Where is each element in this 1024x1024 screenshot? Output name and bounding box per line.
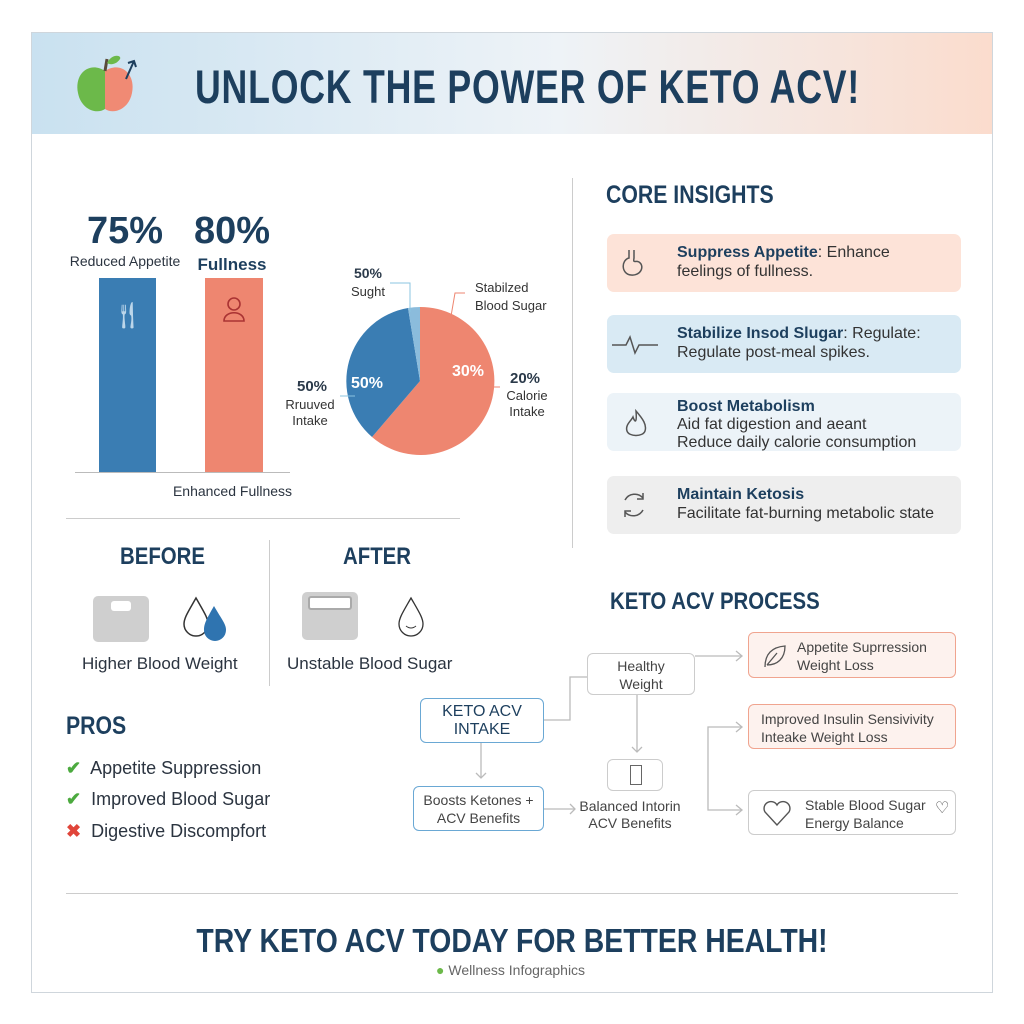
bar chart: Fullness xyxy=(198,255,266,274)
bar chart: Enhanced Fullness xyxy=(173,483,292,499)
pie chart: Blood Sugar xyxy=(475,298,547,313)
before / after panel xyxy=(82,540,452,686)
pie chart: Calorie xyxy=(506,388,548,403)
bar chart xyxy=(70,210,292,499)
pros list: ✔ Appetite Suppression xyxy=(66,758,261,778)
card: maintain ketosis: Maintain Ketosis xyxy=(677,486,804,503)
icon: scale after xyxy=(302,592,358,640)
flow: improved insulin: Inteake Weight Loss xyxy=(761,729,888,745)
pie chart: 50% xyxy=(354,265,383,281)
flow: healthy weight: Healthy xyxy=(617,658,665,674)
card: maintain ketosis: Facilitate fat-burning metabolic state xyxy=(677,505,934,522)
footer title: TRY KETO ACV TODAY FOR BETTER HEALTH! xyxy=(196,922,828,959)
flow: stable blood sugar xyxy=(748,790,956,835)
flow: healthy weight xyxy=(587,653,695,695)
flow: keto acv intake: INTAKE xyxy=(454,721,510,738)
flow: improved insulin xyxy=(748,704,956,749)
heading: core insights: CORE INSIGHTS xyxy=(606,181,774,209)
pie chart: Intake xyxy=(292,413,328,428)
flow arrows xyxy=(476,650,743,816)
card: suppress appetite: feelings of fullness. xyxy=(677,263,813,280)
pros list: ✖ Digestive Discompfort xyxy=(66,821,266,841)
flow: keto acv intake xyxy=(420,698,544,743)
bar chart: 75% xyxy=(87,210,163,252)
flow: healthy weight: Weight xyxy=(619,676,663,692)
pie chart: Sught xyxy=(351,284,385,299)
card: suppress appetite xyxy=(607,234,961,292)
pros list xyxy=(66,712,270,841)
icon: scale before xyxy=(93,596,149,642)
before / after panel: BEFORE xyxy=(120,543,205,570)
card: boost metabolism xyxy=(607,393,961,451)
flow: appetite suppression: Weight Loss xyxy=(797,657,874,673)
bar chart: 🍴︎ xyxy=(111,300,144,330)
bar chart: 80% xyxy=(194,210,270,252)
card: stabilize blood sugar xyxy=(607,315,961,373)
flow: stable blood sugar: Stable Blood Sugar xyxy=(805,797,926,813)
card: boost metabolism: Boost Metabolism xyxy=(677,398,815,415)
flow: balanced text xyxy=(579,798,681,831)
flow: keto acv intake: KETO ACV xyxy=(442,703,522,720)
pie chart: 20% xyxy=(510,370,540,387)
pie chart: 50% xyxy=(297,378,327,395)
before / after panel: AFTER xyxy=(343,543,411,570)
footer credit: ● Wellness Infographics xyxy=(436,962,585,978)
bar chart: Reduced Appetite xyxy=(70,253,180,269)
card: maintain ketosis xyxy=(607,476,961,534)
flow: stable blood sugar: ♡ xyxy=(935,800,949,817)
pie chart xyxy=(285,265,548,455)
flow: appetite suppression: Appetite Suprression xyxy=(797,639,927,655)
flow: stable blood sugar: Energy Balance xyxy=(805,815,904,831)
before / after panel: Unstable Blood Sugar xyxy=(287,654,452,673)
pie chart: Stabilzed xyxy=(475,280,528,295)
pie chart: 50% xyxy=(351,375,383,392)
heading: process: KETO ACV PROCESS xyxy=(610,588,820,615)
flow: appetite suppression xyxy=(748,632,956,678)
card: suppress appetite: Suppress Appetite: Enhance xyxy=(677,244,890,261)
flow: boosts ketones xyxy=(413,786,544,831)
flow: improved insulin: Improved Insulin Sensivivity xyxy=(761,711,934,727)
icon: apple xyxy=(77,56,137,112)
pie chart: Intake xyxy=(509,404,545,419)
card: stabilize blood sugar: Stabilize Insod Slugar: Regulate: xyxy=(677,325,921,342)
pie chart: 30% xyxy=(452,363,484,380)
pie chart: Rruuved xyxy=(285,397,335,412)
before / after panel: Higher Blood Weight xyxy=(82,654,238,673)
pros list: ✔ Improved Blood Sugar xyxy=(66,789,270,809)
card: boost metabolism: Reduce daily calorie consumption xyxy=(677,434,916,451)
header band xyxy=(32,33,992,134)
flow: icon box xyxy=(607,759,663,791)
icon: drops xyxy=(183,596,226,641)
flow: boosts ketones: Boosts Ketones + xyxy=(423,792,534,808)
card: stabilize blood sugar: Regulate post-meal spikes. xyxy=(677,344,870,361)
flow: balanced text: ACV Benefits xyxy=(588,815,672,831)
pros list: PROS xyxy=(66,712,126,740)
flow: boosts ketones: ACV Benefits xyxy=(437,810,520,826)
title: UNLOCK THE POWER OF KETO ACV! xyxy=(194,60,860,113)
card: boost metabolism: Aid fat digestion and aeant xyxy=(677,416,866,433)
flow: balanced text: Balanced Intorin xyxy=(579,798,681,814)
